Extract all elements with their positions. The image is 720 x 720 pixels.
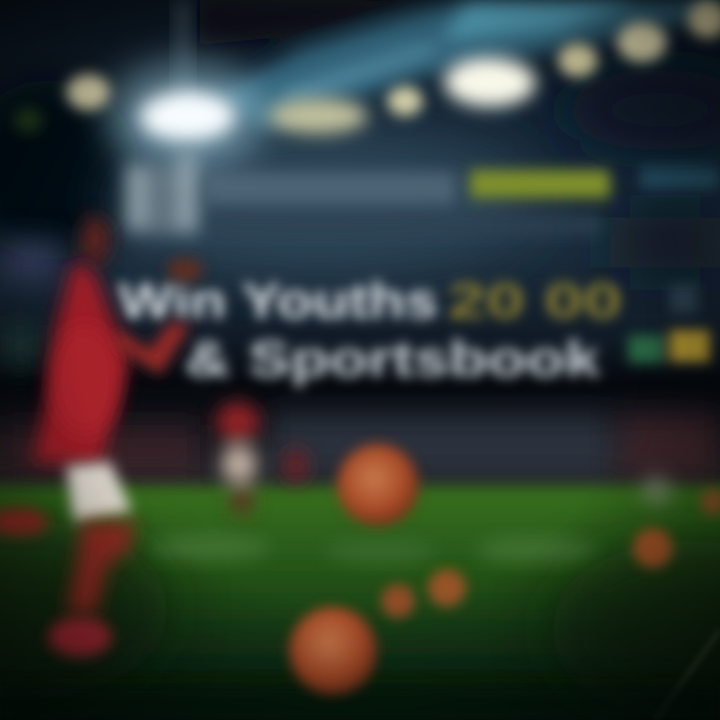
headline text, blurred bbox=[118, 150, 720, 387]
football pitch bbox=[0, 486, 720, 720]
legs bbox=[66, 522, 135, 615]
headline line 1 bbox=[205, 167, 720, 236]
ball: small right bbox=[428, 569, 466, 607]
headline line 3: & Sportsbook bbox=[185, 331, 600, 387]
boot bbox=[48, 617, 112, 657]
ball: foreground bbox=[289, 607, 377, 695]
main player in red bbox=[0, 216, 203, 657]
head bbox=[80, 216, 110, 264]
headline line 2: 20 00 bbox=[447, 273, 622, 329]
logo mark bbox=[125, 150, 200, 235]
shorts bbox=[66, 462, 132, 522]
ball: edge bbox=[701, 489, 720, 515]
distant player bbox=[216, 402, 672, 513]
torso bbox=[32, 263, 128, 465]
headline line 2 bbox=[118, 273, 698, 329]
stadium roof bbox=[200, 0, 720, 130]
headline line 2: Win Youths bbox=[118, 273, 438, 329]
crowd band bbox=[0, 240, 720, 480]
ball: centre bbox=[337, 444, 419, 526]
arm bbox=[115, 322, 190, 375]
ball: small left bbox=[381, 584, 415, 618]
footballs bbox=[289, 444, 720, 695]
ball: far right bbox=[633, 528, 673, 568]
headline line 3 bbox=[185, 330, 710, 387]
floodlights bbox=[13, 0, 720, 170]
